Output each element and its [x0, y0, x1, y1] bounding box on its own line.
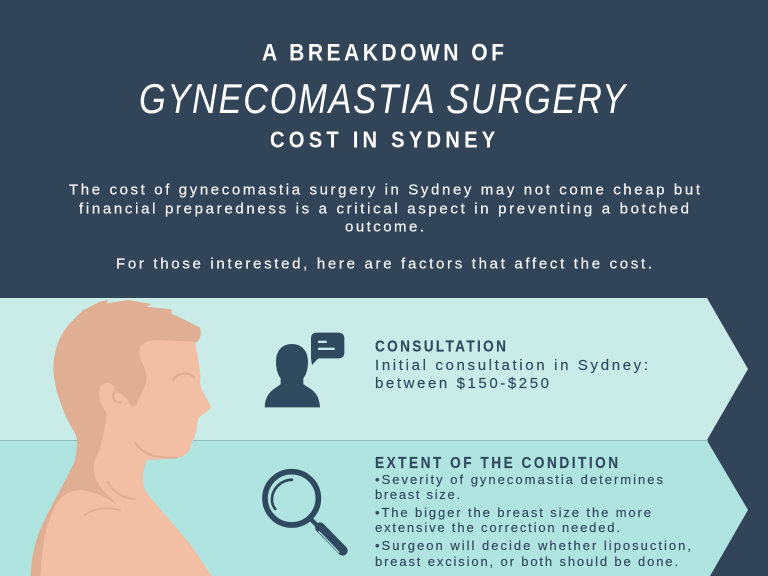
text: consultation — [375, 339, 648, 392]
title: COST IN SYDNEY — [270, 126, 496, 153]
intro text: financial preparedness is a critical aspect in preventing a botched — [79, 200, 689, 218]
text: extent of the condition: breast excision, or both should be done. — [375, 554, 678, 569]
text: consultation: Initial consultation in Sydney: — [375, 357, 648, 374]
title: A BREAKDOWN OF — [262, 39, 504, 66]
title — [139, 39, 627, 153]
text: extent of the condition — [375, 455, 691, 569]
divider line — [0, 440, 708, 441]
intro text: For those interested, here are factors that affect the cost. — [116, 256, 652, 272]
panel: extent of the condition — [0, 440, 748, 576]
panel: consultation — [0, 298, 748, 440]
illustration: man in profile — [31, 300, 212, 576]
text: extent of the condition: •Surgeon will decide whether liposuction, — [375, 538, 691, 553]
title: GYNECOMASTIA SURGERY — [139, 76, 627, 123]
text: extent of the condition: EXTENT OF THE CONDITION — [375, 455, 618, 472]
icon: person with speech bubble — [265, 333, 344, 407]
icon: magnifying glass — [265, 472, 343, 553]
text: extent of the condition: breast size. — [375, 487, 460, 502]
text: extent of the condition: •Severity of gynecomastia determines — [375, 472, 664, 487]
intro text — [69, 182, 701, 272]
text: consultation: between $150-$250 — [375, 375, 549, 392]
intro text: outcome. — [345, 218, 424, 236]
text: consultation: CONSULTATION — [375, 339, 506, 356]
text: extent of the condition: extensive the correction needed. — [375, 520, 620, 535]
text: extent of the condition: •The bigger the breast size the more — [375, 505, 651, 520]
intro text: The cost of gynecomastia surgery in Sydney may not come cheap but — [69, 182, 701, 198]
